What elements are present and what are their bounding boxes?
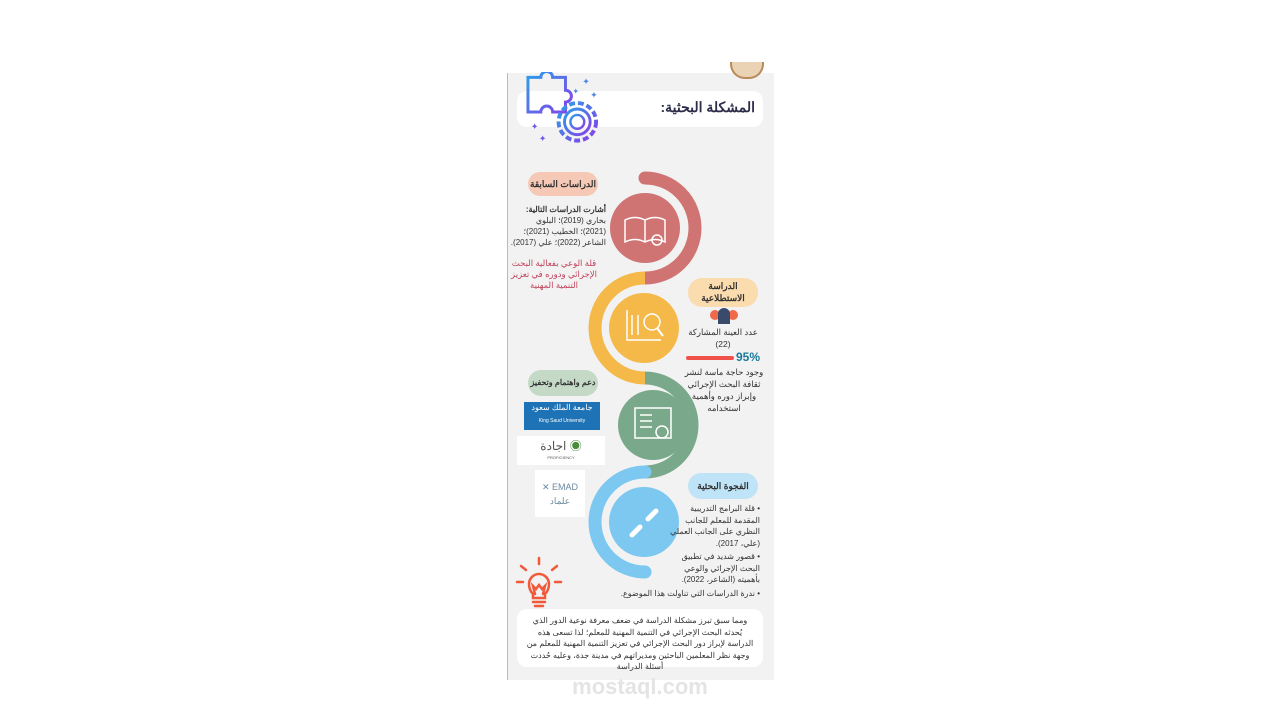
- logo: Emad: ✕ EMAD: [542, 482, 578, 492]
- pill heading: دعم واهتمام وتحفيز: [531, 378, 595, 387]
- pill heading: الدراسة الاستطلاعية: [701, 281, 745, 303]
- text block: وجود حاجة ماسة لنشر ثقافة البحث الإجرائي وإبراز دوره وأهمية استخدامه: [685, 367, 763, 413]
- icon: puzzle gear: ✦: [539, 134, 547, 144]
- highlighted text: قلة الوعي بفعالية البحث الإجرائي ودوره في تعزيز التنمية المهنية: [511, 258, 597, 290]
- heading box: [517, 91, 763, 127]
- conclusion box: [517, 609, 763, 667]
- icon: lightbulb: [516, 556, 562, 608]
- logo: Emad: [535, 470, 585, 517]
- stat 95%: 95%: [736, 350, 760, 364]
- pill heading: [688, 278, 758, 307]
- text block: أشارت الدراسات التالية:: [526, 205, 606, 214]
- logo: Ijada: PROFICIENCY: [547, 455, 575, 460]
- logo: Ijada: اجادة ◉: [540, 439, 582, 453]
- icon: top badge: [730, 62, 764, 79]
- bullet list: [621, 504, 760, 598]
- text block: ومما سبق تبرز مشكلة الدراسة في ضعف معرفة نوعية الدور الذي يُحدثه البحث الإجرائي في التنمية المهنية للمعلم؛ لذا تسعى هذه الدراسة لإبراز دور البحث الإجرائي في تعزيز التنمية المهنية للمعلم من وجهة نظر المعلمين الباحثين ومديراتهم في مدينة جدة، وعليه حُددت أسئلة الدراسة: [527, 616, 753, 671]
- icon: broken chain: [609, 487, 679, 557]
- chart: snake timeline: [588, 172, 702, 578]
- bullet list: • ندرة الدراسات التي تناولت هذا الموضوع.: [621, 588, 760, 598]
- logo: Emad: علماد: [550, 496, 570, 506]
- panel: support: [517, 370, 605, 517]
- pill heading: [528, 370, 598, 396]
- logo: King Saud University: [524, 402, 600, 430]
- icon: puzzle gear: [526, 72, 598, 144]
- pill heading: الدراسات السابقة: [530, 179, 596, 189]
- pill heading: [528, 172, 598, 196]
- bar: 95%: [686, 356, 734, 360]
- pill heading: [688, 473, 758, 499]
- watermark: mostaql.com: [572, 674, 708, 699]
- panel: main infographic: [507, 73, 774, 680]
- icon: research chart: [609, 293, 679, 363]
- logo: King Saud University: King Saud University: [539, 418, 585, 424]
- icon: puzzle gear: ✦: [531, 122, 539, 132]
- icon: puzzle gear: ✦: [582, 76, 590, 86]
- title: المشكلة البحثية:: [660, 99, 755, 115]
- bullet list: • قلة البرامج التدريبية المقدمة للمعلم للجانب النظري على الجانب العملي (علي، 2017).: [670, 504, 760, 548]
- text: sample size: عدد العينة المشاركة (22): [688, 327, 758, 349]
- text block: بخاري (2019)؛ البلوي (2021)؛ الخطيب (2021)؛ الشاعر (2022)؛ علي (2017).: [511, 216, 606, 247]
- icon: puzzle gear: ✦: [590, 90, 598, 100]
- panel: previous studies: [510, 172, 606, 290]
- icon: certificate book: [618, 390, 688, 460]
- icon: people: [710, 308, 738, 324]
- bullet list: • قصور شديد في تطبيق البحث الإجرائي والوعي بأهميته (الشاعر، 2022).: [681, 552, 760, 584]
- pill heading: الفجوة البحثية: [697, 481, 749, 491]
- logo: King Saud University: جامعة الملك سعود: [531, 403, 593, 412]
- panel: research gap: [621, 473, 760, 598]
- logo: Ijada: [517, 436, 605, 465]
- icon: book magnifier: [610, 193, 680, 263]
- icon: puzzle gear: ✦: [572, 87, 579, 96]
- panel: exploratory study: [684, 278, 763, 413]
